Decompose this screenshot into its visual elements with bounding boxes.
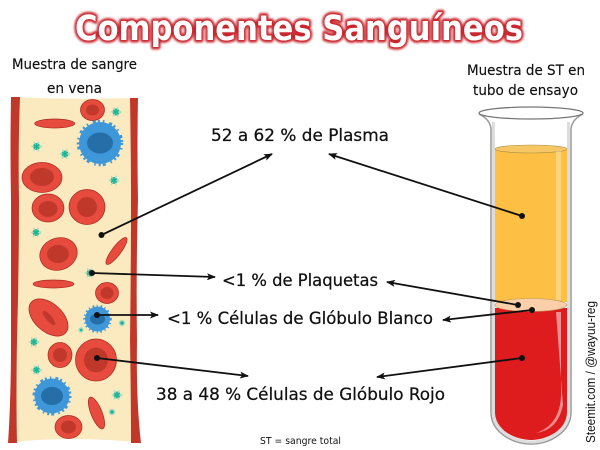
arrow: tube red cell [377,358,522,377]
vein left wall [8,97,20,443]
tube highlight [556,151,561,300]
label: white cells: <1 % Células de Glóbulo Blanco [167,309,433,329]
title: Componentes Sanguíneos [75,9,523,49]
heading: vein sample: Muestra de sangre [12,57,137,73]
arrow: tube white cell [443,310,532,320]
heading: vein sample: en vena [47,81,102,97]
illustration: blood vein [8,97,141,443]
credit: Steemit.com / @wayuu-reg [583,301,598,443]
heading: test tube sample: tubo de ensayo [473,83,578,99]
red blood cells [22,100,130,438]
heading: test tube sample [467,63,585,99]
tube glass [479,114,583,444]
title: Componentes Sanguíneos [75,9,523,49]
arrow: tube platelet [387,282,518,305]
red cell layer [495,308,567,440]
vein plasma background [12,97,136,442]
heading: vein sample [12,57,137,97]
buffy coat layer [495,298,567,312]
arrow: tube plasma [329,154,522,216]
label: platelets: <1 % de Plaquetas [222,271,378,291]
platelets [30,108,124,414]
arrows from vein [89,154,272,376]
tube glass wall [494,122,568,442]
footnote: ST = sangre total [260,436,341,447]
arrow dots: vein [89,232,104,361]
arrow: vein platelet [92,273,215,277]
arrow dots: tube [515,213,535,361]
arrow: vein red cell [97,358,248,376]
illustration: test tube [479,107,583,444]
white blood cells [34,122,122,414]
tube lip [479,107,583,119]
heading: test tube sample: Muestra de ST en [467,63,585,79]
arrows from tube [329,154,535,377]
vein right wall [130,98,141,443]
arrow: vein white cell [97,314,158,316]
label: red cells: 38 a 48 % Células de Glóbulo Rojo [156,385,445,405]
label: plasma: 52 a 62 % de Plasma [211,126,389,146]
plasma layer [495,149,567,302]
arrow: vein plasma [102,154,272,235]
